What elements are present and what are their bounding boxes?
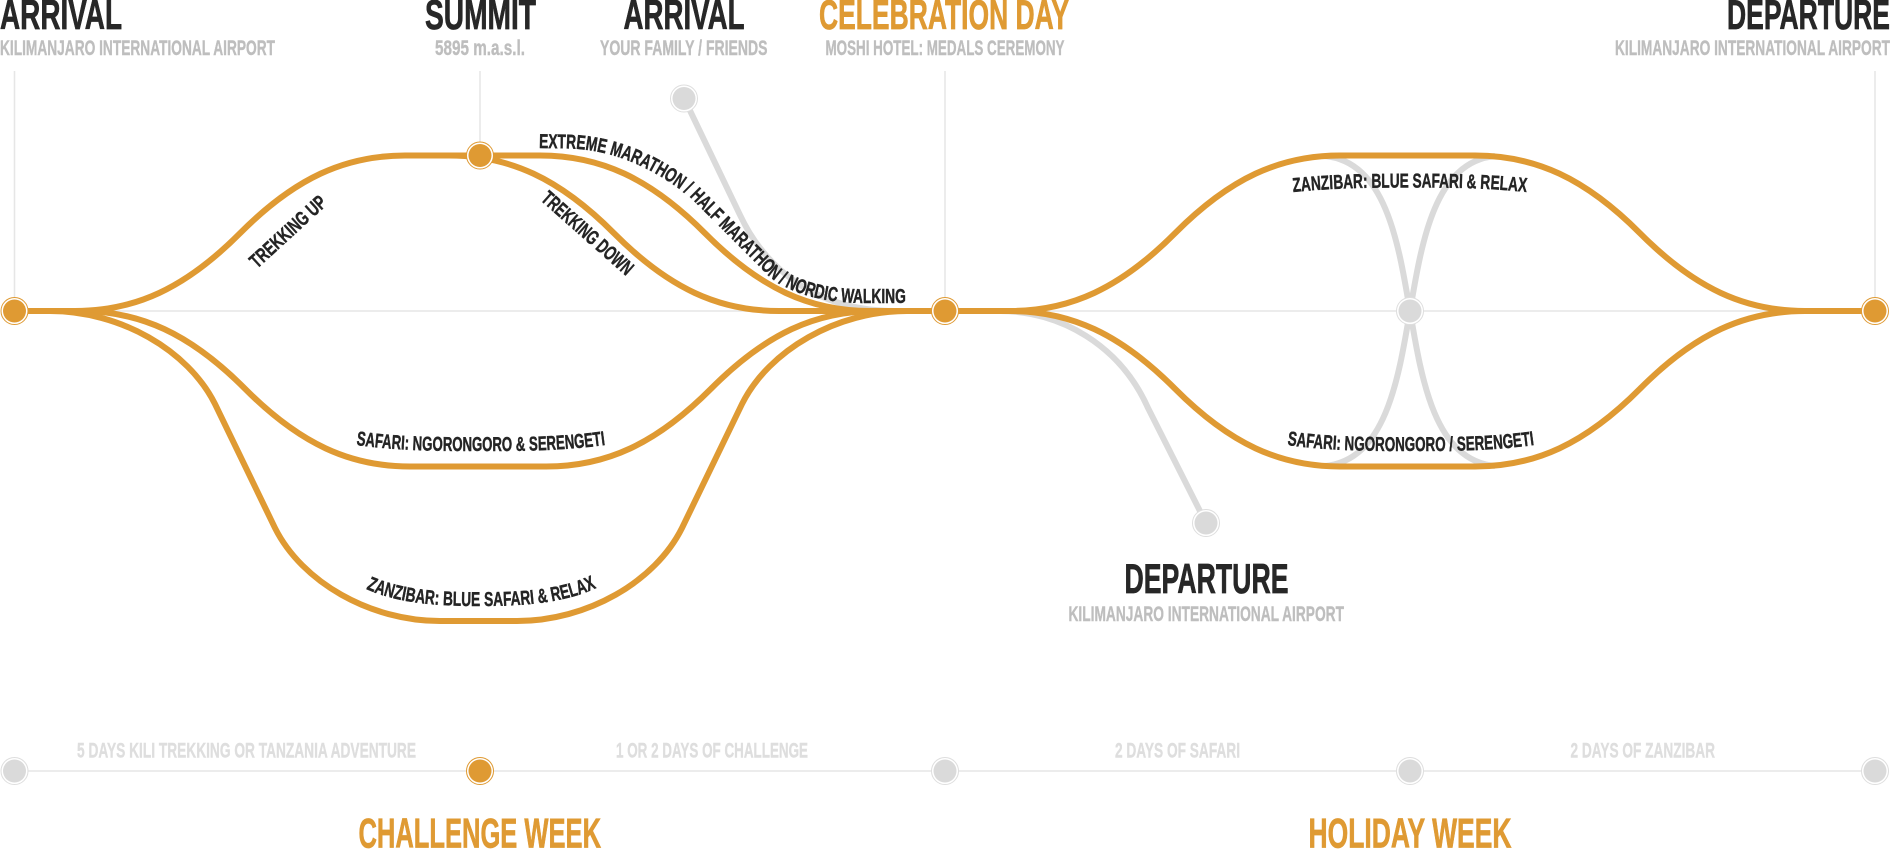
heading: arrival: KILIMANJARO INTERNATIONAL AIRPORT [0,37,275,60]
duration: challenge: 1 OR 2 DAYS OF CHALLENGE [616,740,808,762]
label: zanzibar challenge: ZANZIBAR: BLUE SAFARI & RELAX [366,575,597,606]
node: family arrival [670,85,698,112]
node: arrival [1,298,28,324]
orange routes [14,156,1875,621]
label: trekking down: TREKKING DOWN [542,190,635,276]
grey optional routes [684,98,1495,523]
label: safari holiday: SAFARI: NGORONGORO / SERENGETI [1288,431,1534,452]
timeline node: week boundary [932,758,958,784]
route: trekking up [14,156,480,311]
route nodes [1,85,1888,536]
bottom timeline [1,740,1888,784]
timeline node: week two midpoint [1396,758,1424,784]
route: trekking down [449,156,945,311]
route: early departure [1000,311,1206,523]
duration: safari: 2 DAYS OF SAFARI [1115,740,1240,762]
timeline node: week one midpoint [466,758,494,784]
route: safari challenge week [14,311,945,466]
label: zanzibar holiday: ZANZIBAR: BLUE SAFARI & RELAX [1292,173,1528,192]
node: final departure [1862,298,1888,324]
node: celebration day [932,298,958,324]
heading: celebration day [819,0,1069,60]
heading: family arrival [600,0,768,60]
node: summit [466,142,494,169]
heading: summit: 5895 m.a.s.l. [435,37,525,60]
duration: zanzibar: 2 DAYS OF ZANZIBAR [1570,740,1715,762]
heading: celebration day: MOSHI HOTEL: MEDALS CEREMONY [826,37,1064,60]
route: marathon [480,156,945,311]
heading: summit [425,0,536,60]
label: trekking up: TREKKING UP [248,196,324,268]
node: holiday hub [1396,298,1424,324]
route: safari holiday week [945,311,1875,466]
timeline node: start [1,758,28,784]
label: marathon: EXTREME MARATHON / HALF MARATHON / NORDIC WALKING [540,134,906,304]
route: zanzibar holiday week [945,156,1875,311]
heading: early departure: KILIMANJARO INTERNATIONAL AIRPORT [1068,603,1344,626]
label: safari challenge: SAFARI: NGORONGORO & SERENGETI [356,431,605,452]
heading: final departure [1615,0,1890,60]
duration: trekking: 5 DAYS KILI TREKKING OR TANZANIA ADVENTURE [77,740,416,762]
heading: early departure: DEPARTURE [1124,555,1288,602]
node: early departure [1192,510,1220,536]
timeline node: end [1862,758,1888,784]
route: family arrival [684,98,895,311]
heading: early departure [1068,555,1344,626]
heading: arrival [0,0,275,60]
route labels [248,134,1534,606]
route: zanzibar challenge week [14,311,945,621]
route: holiday transfer [1325,156,1495,466]
heading: family arrival: YOUR FAMILY / FRIENDS [600,37,768,60]
